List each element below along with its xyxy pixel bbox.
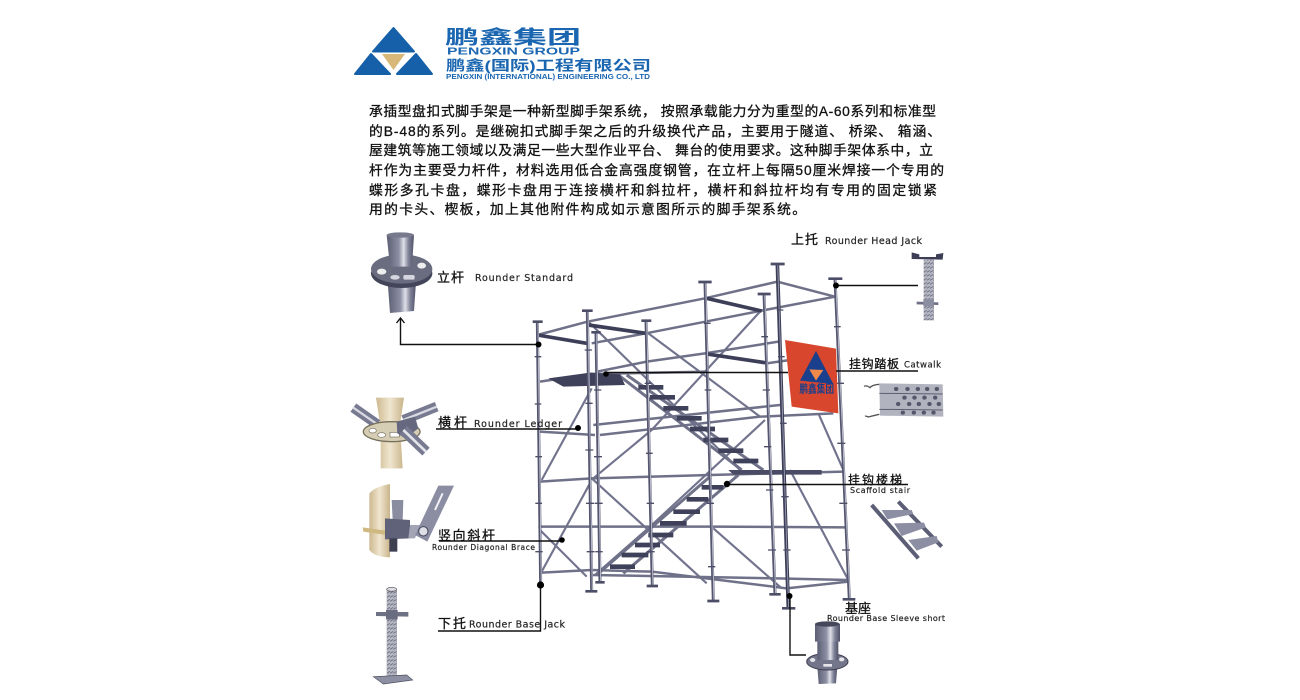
text block: introduction <box>369 103 944 217</box>
orange banner: 鹏鑫集团 <box>799 383 834 396</box>
horizontal ledgers <box>537 282 848 588</box>
part: rounder head jack <box>912 252 943 320</box>
text block: introduction: 蝶形多孔卡盘，蝶形卡盘用于连接横杆和斜拉杆，横杆和斜拉杆均有专用的固定锁紧 <box>369 182 937 198</box>
callout: head jack: 上托 <box>791 232 818 247</box>
logo company name: 鹏鑫(国际)工程有限公司 <box>446 58 651 74</box>
text block: introduction: 杆作为主要受力杆件，材料选用低合金高强度钢管，在立杆上每隔50厘米焊接一个专用的 <box>369 162 944 178</box>
collars on standards <box>535 310 850 567</box>
callout: catwalk: 挂钩踏板 <box>849 357 899 371</box>
icon: triangular logo mark <box>355 28 432 74</box>
callout: diagonal brace <box>432 528 565 552</box>
callout: diagonal brace: Rounder Diagonal Brace <box>432 543 535 552</box>
callout: rounder standard <box>396 270 573 348</box>
text block: introduction: 的B-48的系列。是继碗扣式脚手架之后的升级换代产品，主要用于隧道、 桥梁、 箱涵、 <box>369 123 941 139</box>
callout: catwalk: Catwalk <box>904 360 941 370</box>
logo company name: PENGXIN (INTERNATIONAL) ENGINEERING CO., LTD <box>446 74 650 81</box>
callout: rounder ledger <box>436 415 581 431</box>
callout: rounder standard: 立杆 <box>437 270 464 285</box>
part: rounder base sleeve <box>807 621 848 684</box>
callout: base jack: Rounder Base Jack <box>469 620 565 630</box>
part: rounder base jack <box>373 587 413 684</box>
text block: introduction: 用的卡头、楔板，加上其他附件构成如示意图所示的脚手架系统。 <box>369 201 806 217</box>
callout: catwalk <box>603 357 941 377</box>
callout: head jack: Rounder Head Jack <box>825 236 922 247</box>
upper stair <box>618 375 822 475</box>
logo company name: 鹏鑫集团 <box>445 26 581 48</box>
callout: diagonal brace: 竖向斜杆 <box>438 528 495 543</box>
head jacks and base plates <box>533 264 855 608</box>
part: catwalk <box>864 383 943 417</box>
callout: rounder standard: Rounder Standard <box>475 273 573 284</box>
part: rounder ledger <box>353 398 437 468</box>
logo company name: PENGXIN GROUP <box>447 46 580 58</box>
callout: base jack <box>438 581 565 631</box>
back and diagonal braces <box>540 312 848 588</box>
callout: base sleeve: 基座 <box>845 601 871 616</box>
callout: head jack <box>791 232 922 288</box>
callout: rounder ledger: 横杆 <box>438 415 467 430</box>
part: rounder standard <box>371 232 432 313</box>
orange banner <box>785 340 838 413</box>
callout: scaffold stair <box>724 472 911 495</box>
part: scaffold stair <box>872 502 942 558</box>
lower stair <box>597 475 738 575</box>
catwalk deck <box>548 373 625 387</box>
callout: base sleeve <box>786 593 945 655</box>
callout: rounder ledger: Rounder Ledger <box>474 419 562 430</box>
text block: introduction: 屋建筑等施工领域以及满足一些大型作业平台、 舞台的使用要求。这种脚手架体系中，立 <box>369 142 933 158</box>
logo company name <box>445 26 651 81</box>
callout: scaffold stair: 挂钩楼梯 <box>848 472 902 487</box>
text block: introduction: 承插型盘扣式脚手架是一种新型脚手架系统， 按照承载能力分为重型的A-60系列和标准型 <box>369 103 936 119</box>
vertical standards <box>537 278 849 601</box>
logo: Pengxin Group <box>355 26 651 81</box>
scaffold frame diagram <box>533 263 855 608</box>
callout: base jack: 下托 <box>438 616 466 631</box>
part: rounder diagonal brace <box>363 484 454 557</box>
callout: scaffold stair: Scaffold stair <box>850 486 911 495</box>
callout: base sleeve: Rounder Base Sleeve short <box>827 614 945 623</box>
